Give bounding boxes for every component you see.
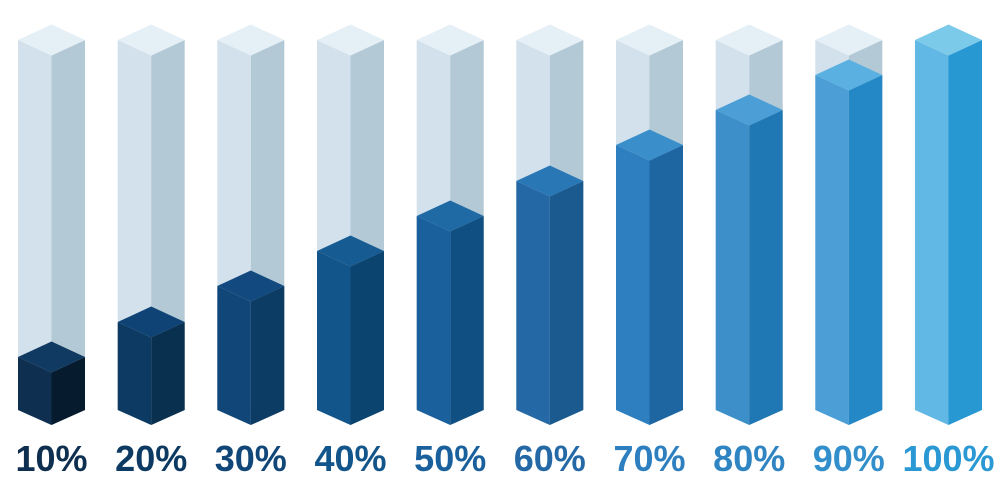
bar: 50% <box>414 24 486 479</box>
bar: 30% <box>215 24 287 479</box>
bar: 20%: 20% <box>115 438 187 479</box>
bar: 80% <box>713 24 785 479</box>
bar: 10% <box>15 24 88 479</box>
bar: 40% <box>314 24 387 479</box>
bar: 70%: 70% <box>613 438 686 479</box>
bar: 100% <box>902 24 995 479</box>
bar: 40%: 40% <box>314 438 387 479</box>
bar: 50%: 50% <box>414 438 486 479</box>
bar: 60%: 60% <box>514 438 586 479</box>
bar: 80%: 80% <box>713 438 785 479</box>
bar: 20% <box>115 24 187 479</box>
bar: 30%: 30% <box>215 438 287 479</box>
bar: 90%: 90% <box>813 438 885 479</box>
bar: 70% <box>613 24 686 479</box>
bar: 10%: 10% <box>15 438 88 479</box>
bar: 100%: 100% <box>902 438 995 479</box>
bar: 60% <box>514 24 586 479</box>
bar: 90% <box>813 24 885 479</box>
